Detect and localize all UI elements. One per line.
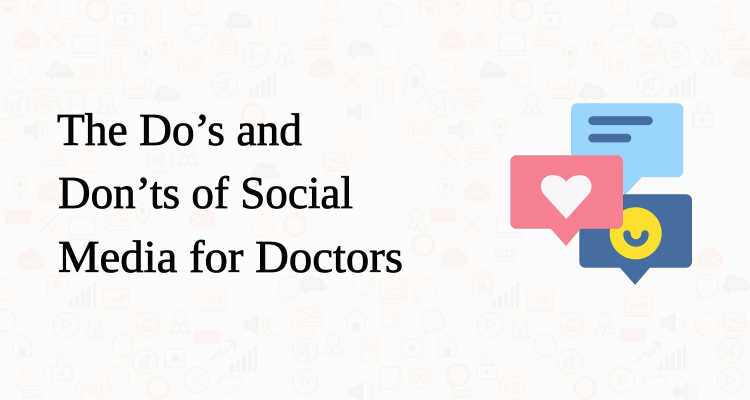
icon: heart bbox=[541, 175, 591, 219]
title: The Do’s and bbox=[57, 105, 302, 155]
title bbox=[57, 105, 403, 282]
title: Media for Doctors bbox=[58, 232, 403, 282]
icon: chat bubbles bbox=[510, 103, 692, 285]
smiley face bbox=[610, 207, 662, 259]
dark blue speech bubble bbox=[579, 194, 692, 285]
title: Don’ts of Social bbox=[58, 168, 353, 218]
light blue speech bubble bbox=[571, 103, 683, 195]
pink speech bubble bbox=[510, 155, 623, 246]
